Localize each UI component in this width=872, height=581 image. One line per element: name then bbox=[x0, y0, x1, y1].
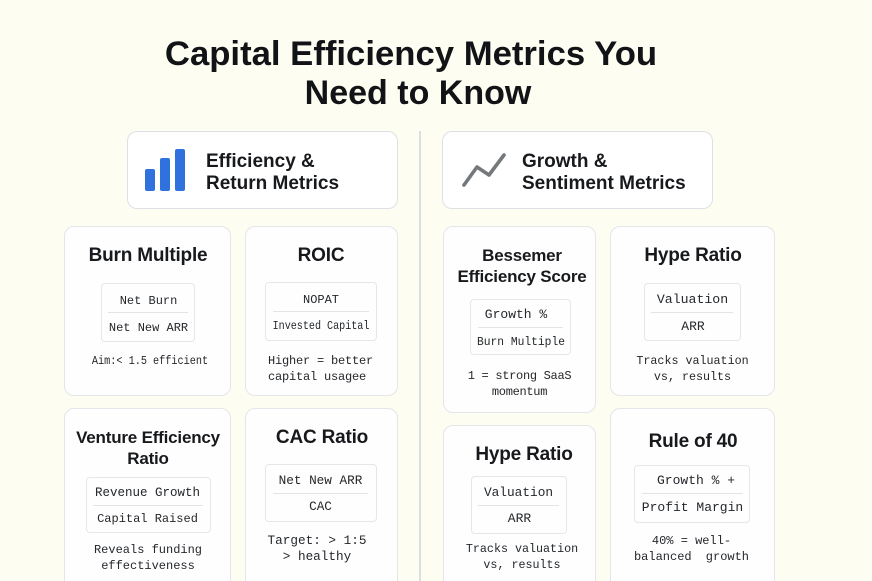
denominator: arr: ARR bbox=[508, 511, 531, 526]
numerator: valuation: Valuation bbox=[484, 485, 553, 500]
numerator: net new arr: Net New ARR bbox=[279, 473, 362, 488]
center divider bbox=[419, 131, 421, 581]
denominator: invested capital: Invested Capital bbox=[272, 319, 369, 333]
heading: venture efficiency ratio bbox=[76, 428, 220, 468]
section heading: Return Metrics bbox=[206, 173, 339, 194]
title line one: Capital Efficiency Metrics You bbox=[165, 35, 657, 73]
numerator: revenue growth: Revenue Growth bbox=[95, 486, 200, 500]
denominator: net new arr: Net New ARR bbox=[109, 321, 188, 335]
panel: hype ratio bottom bbox=[443, 425, 596, 581]
formula box: roic bbox=[265, 282, 377, 341]
denominator: arr: ARR bbox=[681, 319, 705, 334]
numerator: growth percent: Growth % bbox=[485, 307, 547, 322]
note: cac ratio: > healthy bbox=[283, 549, 351, 564]
icon: blue bar chart bbox=[145, 149, 185, 191]
heading: roic: ROIC bbox=[298, 245, 344, 266]
note: bessemer efficiency score bbox=[468, 369, 571, 399]
numerator: growth plus: Growth % + bbox=[657, 473, 735, 488]
formula box: hype ratio bottom bbox=[471, 476, 567, 534]
note: burn multiple: Aim:< 1.5 efficient bbox=[91, 354, 208, 368]
note: venture efficiency ratio: effectiveness bbox=[101, 559, 195, 573]
section heading bbox=[522, 151, 686, 194]
heading: venture efficiency ratio: Venture Efficiency bbox=[76, 428, 220, 447]
heading: rule of 40: Rule of 40 bbox=[649, 431, 737, 452]
note: hype ratio bottom bbox=[466, 542, 578, 572]
note: hype ratio top: Tracks valuation bbox=[636, 354, 749, 368]
note: bessemer efficiency score: 1 = strong SaaS bbox=[468, 369, 571, 383]
heading: cac ratio: CAC Ratio bbox=[276, 427, 368, 448]
denominator: capital raised: Capital Raised bbox=[97, 512, 198, 526]
note: hype ratio bottom: vs, results bbox=[483, 558, 561, 572]
note: roic: capital usagee bbox=[268, 370, 366, 384]
panel: burn multiple bbox=[64, 226, 231, 396]
section header: efficiency and return metrics bbox=[127, 131, 398, 209]
heading: venture efficiency ratio: Ratio bbox=[127, 449, 169, 468]
title line two: Need to Know bbox=[305, 74, 531, 112]
denominator: burn multiple: Burn Multiple bbox=[477, 335, 565, 349]
heading: burn multiple: Burn Multiple bbox=[89, 245, 207, 266]
panel: bessemer efficiency score bbox=[443, 226, 596, 413]
note: hype ratio top: vs, results bbox=[654, 370, 731, 384]
section heading: Efficiency & bbox=[206, 151, 315, 172]
note: cac ratio bbox=[268, 533, 366, 564]
heading: hype ratio bottom: Hype Ratio bbox=[475, 444, 573, 465]
heading: bessemer efficiency score: Efficiency Score bbox=[457, 267, 587, 286]
panel: roic bbox=[245, 226, 398, 396]
note: roic: Higher = better bbox=[268, 354, 373, 368]
note: hype ratio bottom: Tracks valuation bbox=[466, 542, 578, 556]
numerator: valuation: Valuation bbox=[657, 292, 728, 307]
numerator: net burn: Net Burn bbox=[120, 294, 177, 308]
note: rule of 40 bbox=[634, 534, 749, 564]
note: rule of 40: balanced growth bbox=[634, 550, 749, 564]
panel: cac ratio bbox=[245, 408, 398, 581]
heading: bessemer efficiency score bbox=[457, 246, 587, 286]
formula box: bessemer efficiency score bbox=[470, 299, 571, 355]
note: hype ratio top bbox=[636, 354, 749, 384]
denominator: profit margin: Profit Margin bbox=[642, 500, 743, 515]
section header: growth and sentiment metrics bbox=[442, 131, 713, 209]
heading: hype ratio top: Hype Ratio bbox=[644, 245, 742, 266]
numerator: nopat: NOPAT bbox=[303, 293, 339, 307]
panel: rule of 40 bbox=[610, 408, 775, 581]
formula box: hype ratio top bbox=[644, 283, 741, 341]
section heading: Sentiment Metrics bbox=[522, 173, 686, 194]
panel: venture efficiency ratio bbox=[64, 408, 231, 581]
section heading: Growth & bbox=[522, 151, 608, 172]
icon: grey trend line bbox=[462, 153, 506, 187]
formula box: burn multiple bbox=[101, 283, 195, 342]
denominator: cac: CAC bbox=[309, 499, 332, 514]
note: rule of 40: 40% = well- bbox=[652, 534, 731, 548]
section heading bbox=[206, 151, 339, 194]
heading: bessemer efficiency score: Bessemer bbox=[482, 246, 562, 265]
formula box: cac ratio bbox=[265, 464, 377, 522]
panel: hype ratio top bbox=[610, 226, 775, 396]
note: bessemer efficiency score: momentum bbox=[492, 385, 547, 399]
formula box: venture efficiency ratio bbox=[86, 477, 211, 533]
note: venture efficiency ratio: Reveals funding bbox=[94, 543, 202, 557]
note: cac ratio: Target: > 1:5 bbox=[268, 533, 366, 548]
note: roic bbox=[268, 354, 373, 384]
note: venture efficiency ratio bbox=[94, 543, 202, 573]
formula box: rule of 40 bbox=[634, 465, 750, 523]
